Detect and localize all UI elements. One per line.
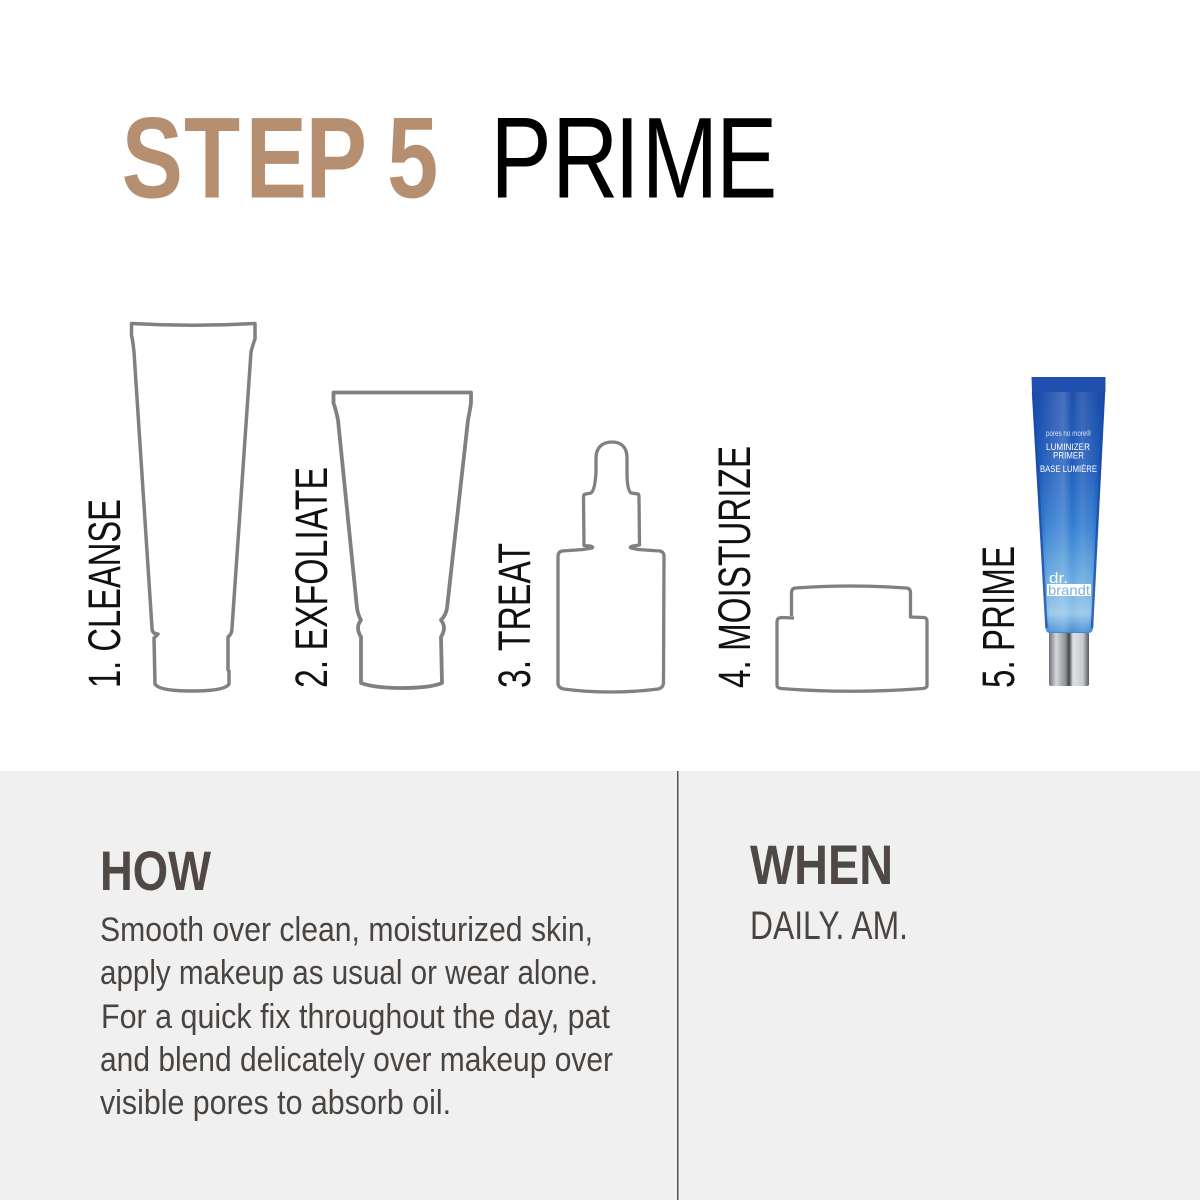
- tube brand box: brandt: [1048, 582, 1090, 598]
- how instructions: apply makeup as usual or wear alone.: [100, 954, 598, 992]
- icon: exfoliator tube outline: [334, 392, 471, 688]
- step 5 label: 5. PRIME: [973, 546, 1024, 688]
- icon: cream jar outline: [777, 586, 927, 691]
- how instructions: Smooth over clean, moisturized skin,: [100, 911, 593, 949]
- tube label text: BASE LUMIÈRE: [1040, 464, 1097, 475]
- title: [122, 95, 777, 223]
- tube label text: LUMINIZER: [1046, 442, 1090, 453]
- tube body sheen: [1038, 392, 1099, 632]
- how heading: HOW: [100, 839, 211, 902]
- tube body: [1032, 392, 1105, 633]
- how instructions: For a quick fix throughout the day, pat: [101, 998, 610, 1036]
- step 2 label: 2. EXFOLIATE: [286, 467, 337, 688]
- how instructions: and blend delicately over makeup over: [100, 1041, 613, 1079]
- tube label text: PRIMER: [1053, 450, 1084, 462]
- panel divider: [677, 771, 678, 1200]
- product: luminizer primer tube: [1032, 377, 1106, 686]
- panel background: [0, 771, 678, 1200]
- heading: step name: PRIME: [490, 95, 777, 223]
- step 4 label: 4. MOISTURIZE: [709, 446, 760, 688]
- tube crimp: [1032, 377, 1106, 392]
- product row: [79, 324, 1106, 692]
- icon: dropper bottle outline: [558, 442, 664, 692]
- panel: when: [678, 771, 1200, 1200]
- icon: cleanser tube outline: [132, 324, 255, 691]
- tube cap: [1049, 632, 1089, 686]
- step 3 label: 3. TREAT: [489, 543, 540, 688]
- tube edge shading: [1033, 392, 1104, 628]
- panel: how: [0, 771, 678, 1200]
- tube label text: [1040, 429, 1097, 587]
- heading: step number: STEP 5: [122, 95, 438, 223]
- how instructions: visible pores to absorb oil.: [100, 1084, 451, 1122]
- tube label text: pores no more®: [1046, 429, 1091, 438]
- step 1 label: 1. CLEANSE: [79, 499, 130, 688]
- how instructions: [100, 911, 613, 1122]
- tube label text: dr.: [1049, 570, 1068, 587]
- when value: DAILY. AM.: [750, 904, 908, 948]
- panel background: [678, 771, 1200, 1200]
- when heading: WHEN: [750, 833, 893, 896]
